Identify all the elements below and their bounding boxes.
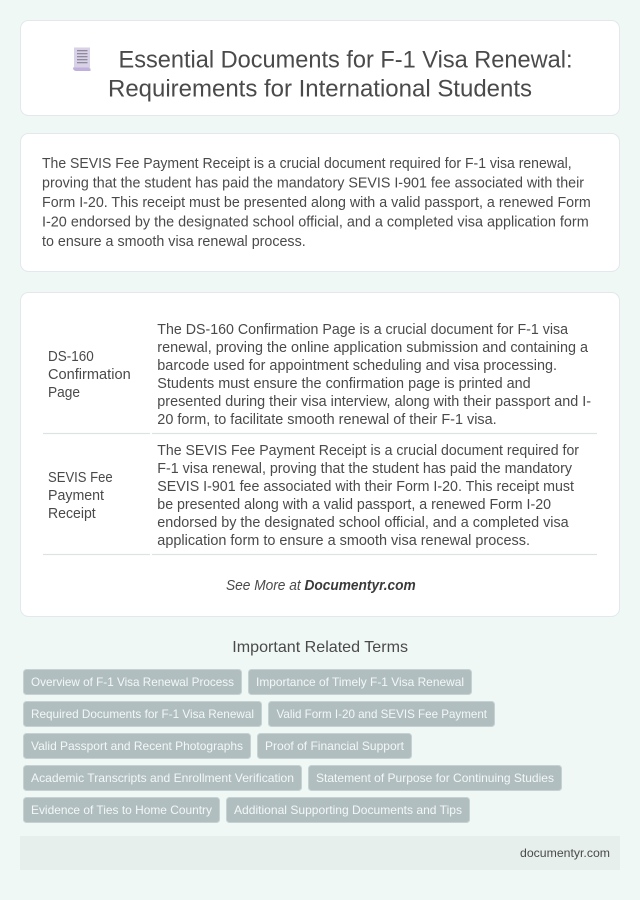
tag: Valid Form I-20 and SEVIS Fee Payment	[276, 707, 488, 721]
tag: Academic Transcripts and Enrollment Verification	[31, 771, 294, 785]
text block: summary paragraph: proving that the student has paid the mandatory SEVIS I-901 fee associated with their	[42, 174, 584, 192]
row description: DS-160: renewal, proving the online application submission and containing a	[157, 340, 588, 356]
tag	[248, 670, 472, 694]
row description: SEVIS: application form to ensure a smooth visa renewal process.	[157, 533, 530, 549]
row label: SEVIS: Receipt	[48, 506, 96, 522]
row label: DS-160: Confirmation	[48, 367, 131, 383]
row label: SEVIS	[48, 470, 113, 522]
row description: DS-160: barcode used for appointment scheduling and visa processing.	[157, 358, 557, 374]
row description: SEVIS: SEVIS I-901 fee associated with their Form I-20. This receipt must	[157, 479, 574, 495]
row description: DS-160: presented during their visa interview, along with their passport and I-	[157, 394, 591, 410]
tag: Evidence of Ties to Home Country	[31, 803, 212, 817]
footer	[20, 836, 620, 870]
row label: SEVIS: SEVIS Fee	[48, 470, 113, 486]
tag: Overview of F-1 Visa Renewal Process	[31, 675, 234, 689]
row label: DS-160: Page	[48, 385, 80, 401]
tag	[308, 766, 562, 790]
tag: Importance of Timely F-1 Visa Renewal	[256, 675, 464, 689]
tag: Valid Passport and Recent Photographs	[31, 739, 243, 753]
row description: DS-160: The DS-160 Confirmation Page is a crucial document for F-1 visa	[157, 322, 568, 338]
row description: SEVIS: endorsed by the designated school official, and a completed visa	[157, 515, 569, 531]
see more link: See More at Documentyr.com	[226, 578, 416, 594]
row description: SEVIS: F-1 visa renewal, proving that the student has paid the mandatory	[157, 461, 573, 477]
title	[108, 46, 572, 102]
tag	[268, 702, 494, 726]
panel: documents table	[20, 292, 620, 616]
tag: Additional Supporting Documents and Tips	[234, 803, 462, 817]
text block: summary paragraph	[42, 155, 591, 250]
row label: SEVIS: Payment	[48, 488, 104, 504]
table row: SEVIS Fee Payment Receipt	[48, 443, 579, 549]
text block: summary paragraph: Form I-20. This receipt must be presented along with a valid passport, a renewed Form	[42, 194, 591, 211]
row description: DS-160: Students must ensure the confirmation page is printed and	[157, 376, 531, 392]
row description: DS-160	[157, 322, 591, 428]
footer: documentyr.com	[520, 846, 610, 860]
tag	[226, 798, 470, 822]
tag: Proof of Financial Support	[265, 739, 405, 753]
text block: summary paragraph: to ensure a smooth visa renewal process.	[42, 233, 306, 250]
heading: important related terms: Important Related Terms	[232, 639, 408, 656]
title: Requirements for International Students	[108, 76, 532, 102]
tag: Required Documents for F-1 Visa Renewal	[31, 707, 254, 721]
tag list: related terms	[24, 670, 562, 822]
row description: SEVIS	[157, 443, 579, 549]
tag	[24, 670, 242, 694]
title: Essential Documents for F-1 Visa Renewal:	[118, 46, 572, 74]
table row: DS-160 Confirmation Page	[48, 322, 591, 428]
panel: summary	[20, 134, 620, 272]
tag: Statement of Purpose for Continuing Studies	[316, 771, 554, 785]
text block: summary paragraph: I-20 endorsed by the designated school official, and a completed visa application form	[42, 214, 589, 230]
tag	[24, 734, 250, 758]
tag	[24, 702, 262, 726]
row description: SEVIS: be presented along with a valid passport, a renewed Form I-20	[157, 497, 551, 513]
tag	[258, 734, 412, 758]
text block: summary paragraph: The SEVIS Fee Payment Receipt is a crucial document required for F-1 visa renewal,	[42, 155, 572, 172]
row description: SEVIS: The SEVIS Fee Payment Receipt is a crucial document required for	[157, 443, 579, 459]
row label: DS-160: DS-160	[48, 349, 94, 365]
tag	[24, 766, 302, 790]
row label: DS-160	[48, 349, 131, 401]
row description: DS-160: 20 form, to facilitate smooth renewal of their F-1 visa.	[157, 412, 497, 428]
tag	[24, 798, 220, 822]
icon: receipt document	[73, 48, 90, 71]
panel: title card	[20, 20, 620, 116]
